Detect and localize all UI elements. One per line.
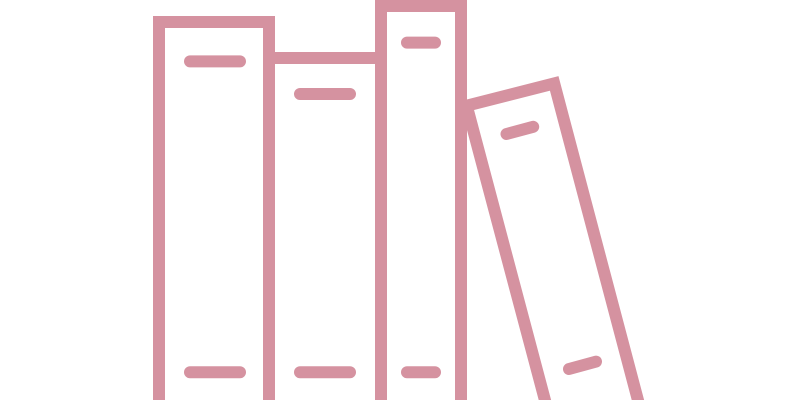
book 1: tall left book <box>159 22 269 400</box>
book 4: leaning book <box>467 83 640 400</box>
book 2: short middle book <box>269 58 381 372</box>
book 3: tallest narrow book <box>381 6 461 400</box>
